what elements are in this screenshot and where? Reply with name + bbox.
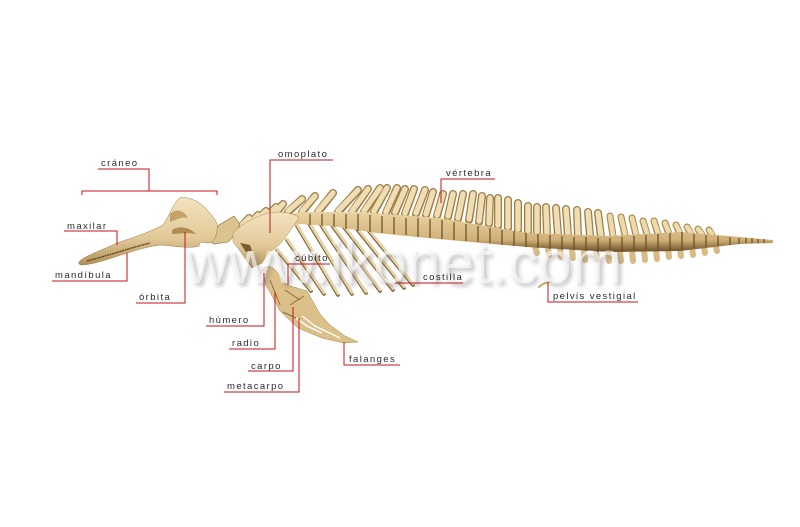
- vertebral column bodies: [238, 212, 773, 252]
- label: falanges: [344, 342, 400, 365]
- label: carpo: [248, 307, 293, 372]
- label: falanges: falanges: [349, 354, 396, 365]
- label: órbita: órbita: [139, 292, 171, 303]
- neck vertebrae: [208, 216, 240, 244]
- label: cráneo: cráneo: [101, 158, 138, 169]
- orbit: [172, 227, 196, 234]
- label: mandíbula: mandíbula: [55, 270, 112, 281]
- label: húmero: [206, 273, 264, 326]
- flipper: [262, 266, 358, 343]
- label: metacarpo: [224, 318, 299, 392]
- label: carpo: carpo: [251, 361, 282, 372]
- carpal shadow: [270, 280, 304, 318]
- label: vértebra: [441, 168, 495, 203]
- label: maxilar: [64, 221, 117, 245]
- label: cúbito: [288, 253, 330, 285]
- label: pelvis vestigial: pelvis vestigial: [553, 291, 637, 302]
- label: radio: radio: [232, 338, 260, 349]
- chevrons: tail: [535, 246, 717, 261]
- neural spines: trunk: [241, 188, 601, 237]
- label: órbita: [136, 232, 185, 303]
- label: mandíbula: [52, 253, 127, 281]
- label: húmero: húmero: [209, 315, 250, 326]
- flipper base: [262, 266, 358, 343]
- label: vértebra: vértebra: [446, 168, 492, 179]
- finger gaps: [296, 316, 340, 338]
- ribs: [277, 221, 413, 295]
- watermark: www.ikonet.com: [187, 232, 625, 299]
- neural spines: tail: [610, 216, 712, 236]
- label: pelvis vestigial: [548, 282, 638, 302]
- skull: [79, 198, 217, 265]
- scapula notch: [240, 243, 252, 252]
- jaw line: [87, 243, 150, 261]
- label: radio: [229, 292, 275, 349]
- label: costilla: costilla: [423, 272, 463, 283]
- watermark: www.ikonet.com: [184, 229, 622, 296]
- label: cráneo: [82, 158, 217, 195]
- skull hollow: [170, 211, 188, 222]
- omoplato: [233, 212, 299, 268]
- label: metacarpo: metacarpo: [227, 381, 284, 392]
- label: omoplato: omoplato: [278, 149, 328, 160]
- skeleton: [79, 188, 773, 343]
- pelvis vestigial: [539, 282, 551, 287]
- label: maxilar: maxilar: [67, 221, 107, 232]
- label: costilla: [395, 272, 463, 283]
- label: omoplato: [270, 149, 333, 233]
- vertebral joints: [310, 214, 764, 252]
- label: cúbito: cúbito: [295, 253, 329, 264]
